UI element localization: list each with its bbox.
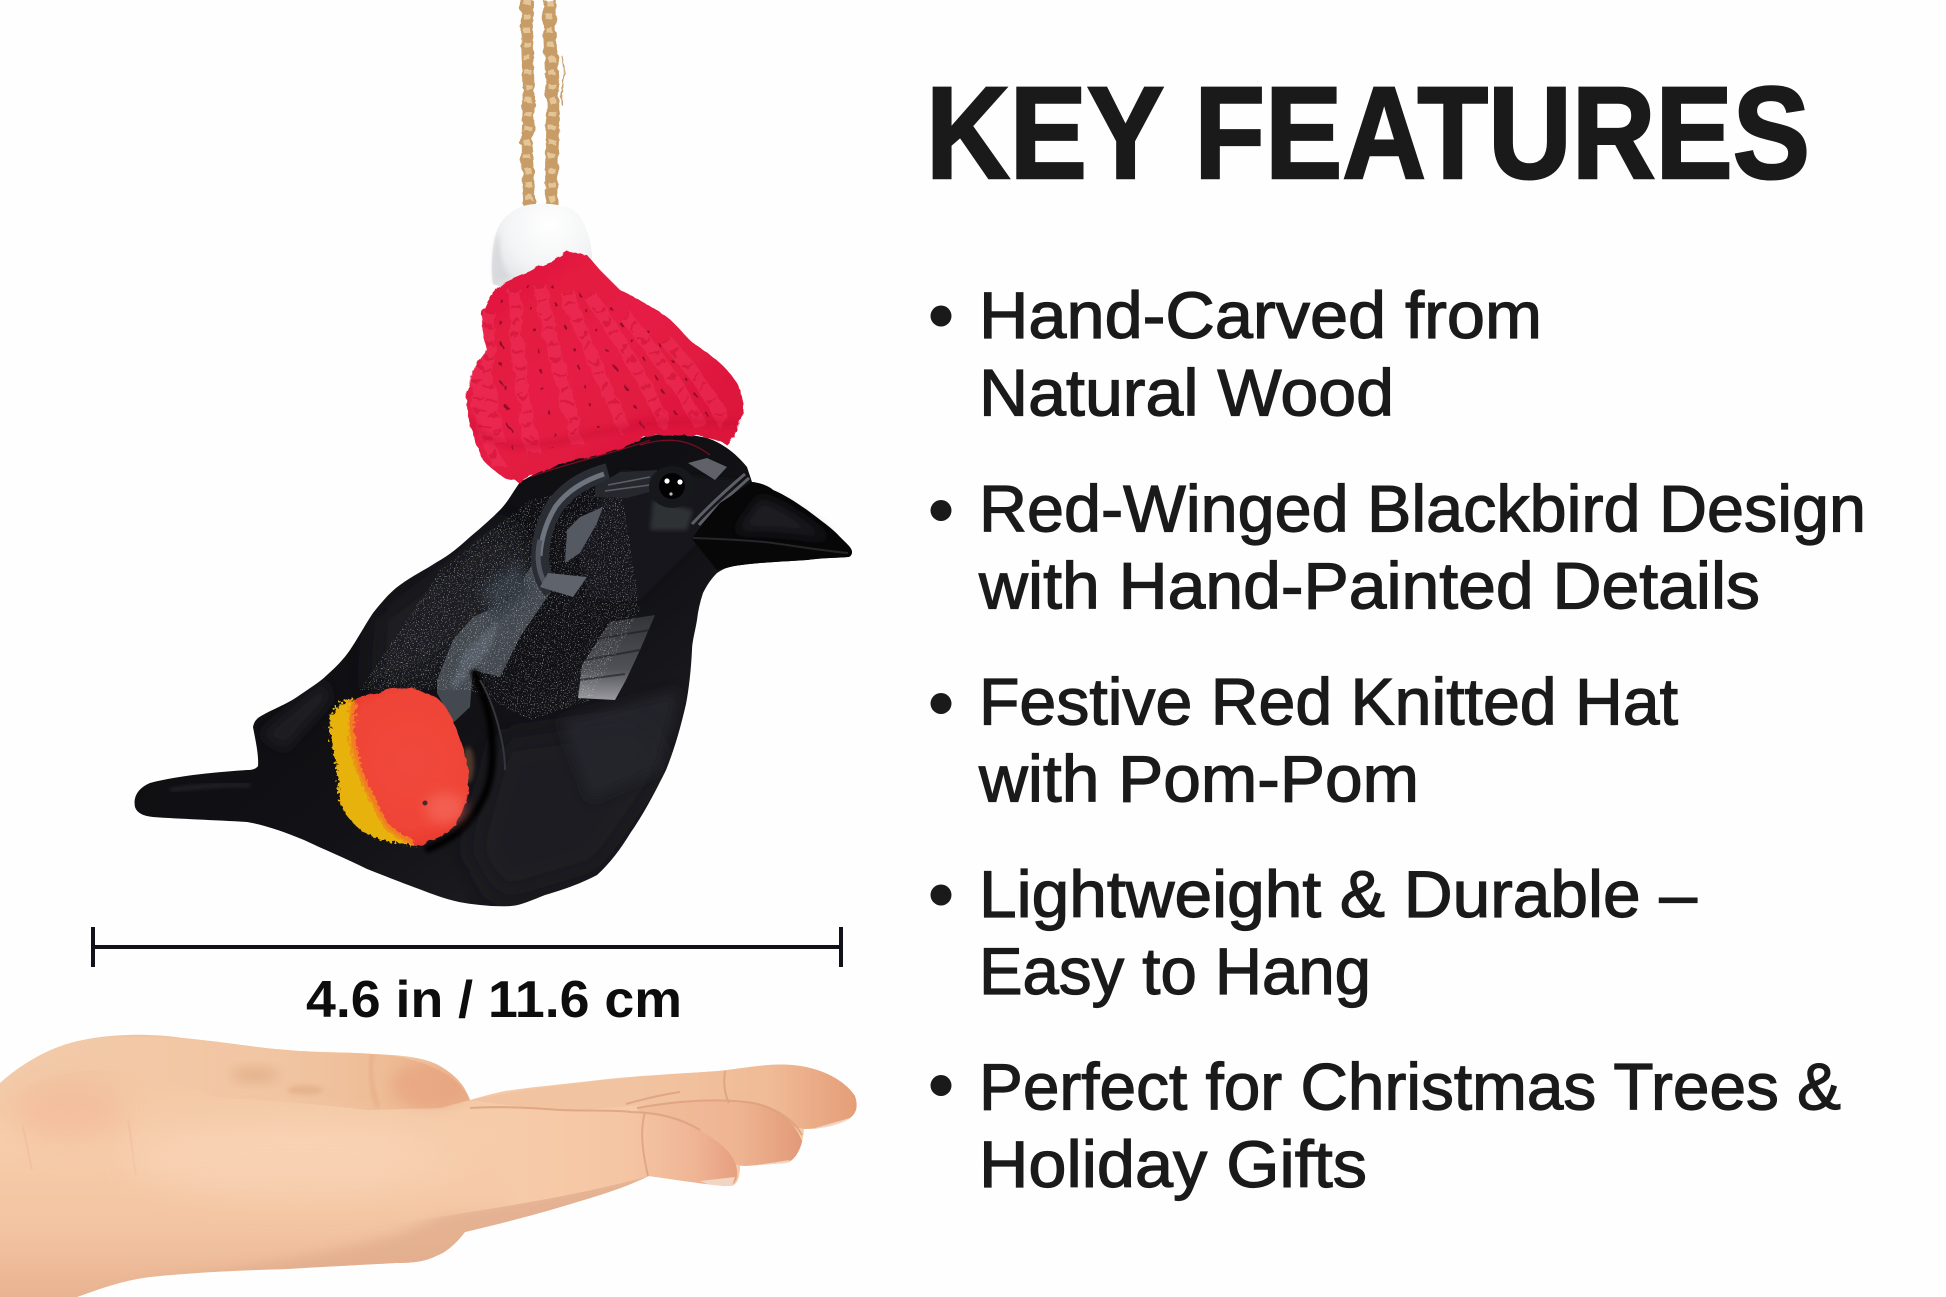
brow lines xyxy=(605,477,650,491)
beak xyxy=(692,482,852,570)
feature: lightweight xyxy=(930,858,1698,1008)
nails xyxy=(700,1118,850,1186)
brow ridge xyxy=(595,470,657,498)
hand: open palm xyxy=(0,1035,857,1297)
neck ridge end block xyxy=(540,573,587,597)
title: KEY FEATURES xyxy=(926,59,1810,206)
feature: lightweight: Lightweight & Durable – xyxy=(979,858,1698,931)
hat fraying threads xyxy=(530,440,710,477)
feature: hand-carved: Hand-Carved from xyxy=(979,279,1542,352)
finger creases xyxy=(470,1071,802,1176)
head hatch highlight xyxy=(688,458,727,480)
feature: hand-carved xyxy=(930,279,1542,430)
feature: lightweight: Easy to Hang xyxy=(979,935,1371,1008)
neck ridge xyxy=(538,472,608,590)
wing patch: small dark mark xyxy=(422,800,428,806)
hand shading and fingers xyxy=(0,1040,857,1272)
dimension line xyxy=(92,927,841,967)
wing groove gloss xyxy=(480,680,505,770)
thumb knuckle dimple xyxy=(231,1068,279,1082)
knit stitches xyxy=(470,285,742,465)
hat: red knitted beanie xyxy=(467,251,744,482)
icon: white pom-pom xyxy=(492,204,592,290)
wing patch: orange blend xyxy=(352,702,413,843)
paint specks xyxy=(360,480,640,720)
beak seam xyxy=(692,474,749,525)
panel: product photo xyxy=(0,0,857,1297)
back finger xyxy=(470,1065,857,1129)
feature: knitted hat: Festive Red Knitted Hat xyxy=(979,666,1678,739)
wing patch: yellow edge xyxy=(329,698,417,845)
feature: holiday gifts: Holiday Gifts xyxy=(979,1128,1367,1201)
face dark hatching xyxy=(650,500,693,530)
feature: holiday gifts xyxy=(930,1050,1841,1201)
middle finger xyxy=(637,1100,802,1166)
dimension label: 4.6 in / 11.6 cm xyxy=(306,970,682,1028)
feature: blackbird design xyxy=(930,472,1866,623)
bird shading and facets xyxy=(170,470,740,900)
face grey patch xyxy=(565,507,603,563)
wrist crease xyxy=(22,1120,133,1170)
wing patch: red xyxy=(350,688,469,845)
brown mark beside wing xyxy=(462,747,474,783)
feature: blackbird design: Red-Winged Blackbird Design xyxy=(979,472,1866,546)
feature: blackbird design: with Hand-Painted Details xyxy=(978,550,1760,623)
thumb xyxy=(0,1037,470,1110)
icon: jute twine hanging loop xyxy=(527,0,563,206)
front finger xyxy=(446,1114,738,1216)
feature: knitted hat: with Pom-Pom xyxy=(978,742,1419,816)
bird body xyxy=(135,434,852,906)
thumb tip flush xyxy=(392,1063,468,1107)
feature: holiday gifts: Perfect for Christmas Trees & xyxy=(979,1050,1841,1124)
wing groove xyxy=(425,670,492,850)
eye xyxy=(649,466,695,508)
heel flush xyxy=(28,1091,112,1137)
bird: carved red-winged blackbird xyxy=(135,434,852,906)
thumb crease xyxy=(371,1054,378,1108)
feature: knitted hat xyxy=(930,666,1678,816)
feature: hand-carved: Natural Wood xyxy=(979,356,1394,430)
palm lower shadow xyxy=(208,1176,662,1272)
panel: key features xyxy=(926,59,1866,1201)
wing patch: highlight xyxy=(425,792,465,824)
palm highlight xyxy=(159,1141,412,1192)
